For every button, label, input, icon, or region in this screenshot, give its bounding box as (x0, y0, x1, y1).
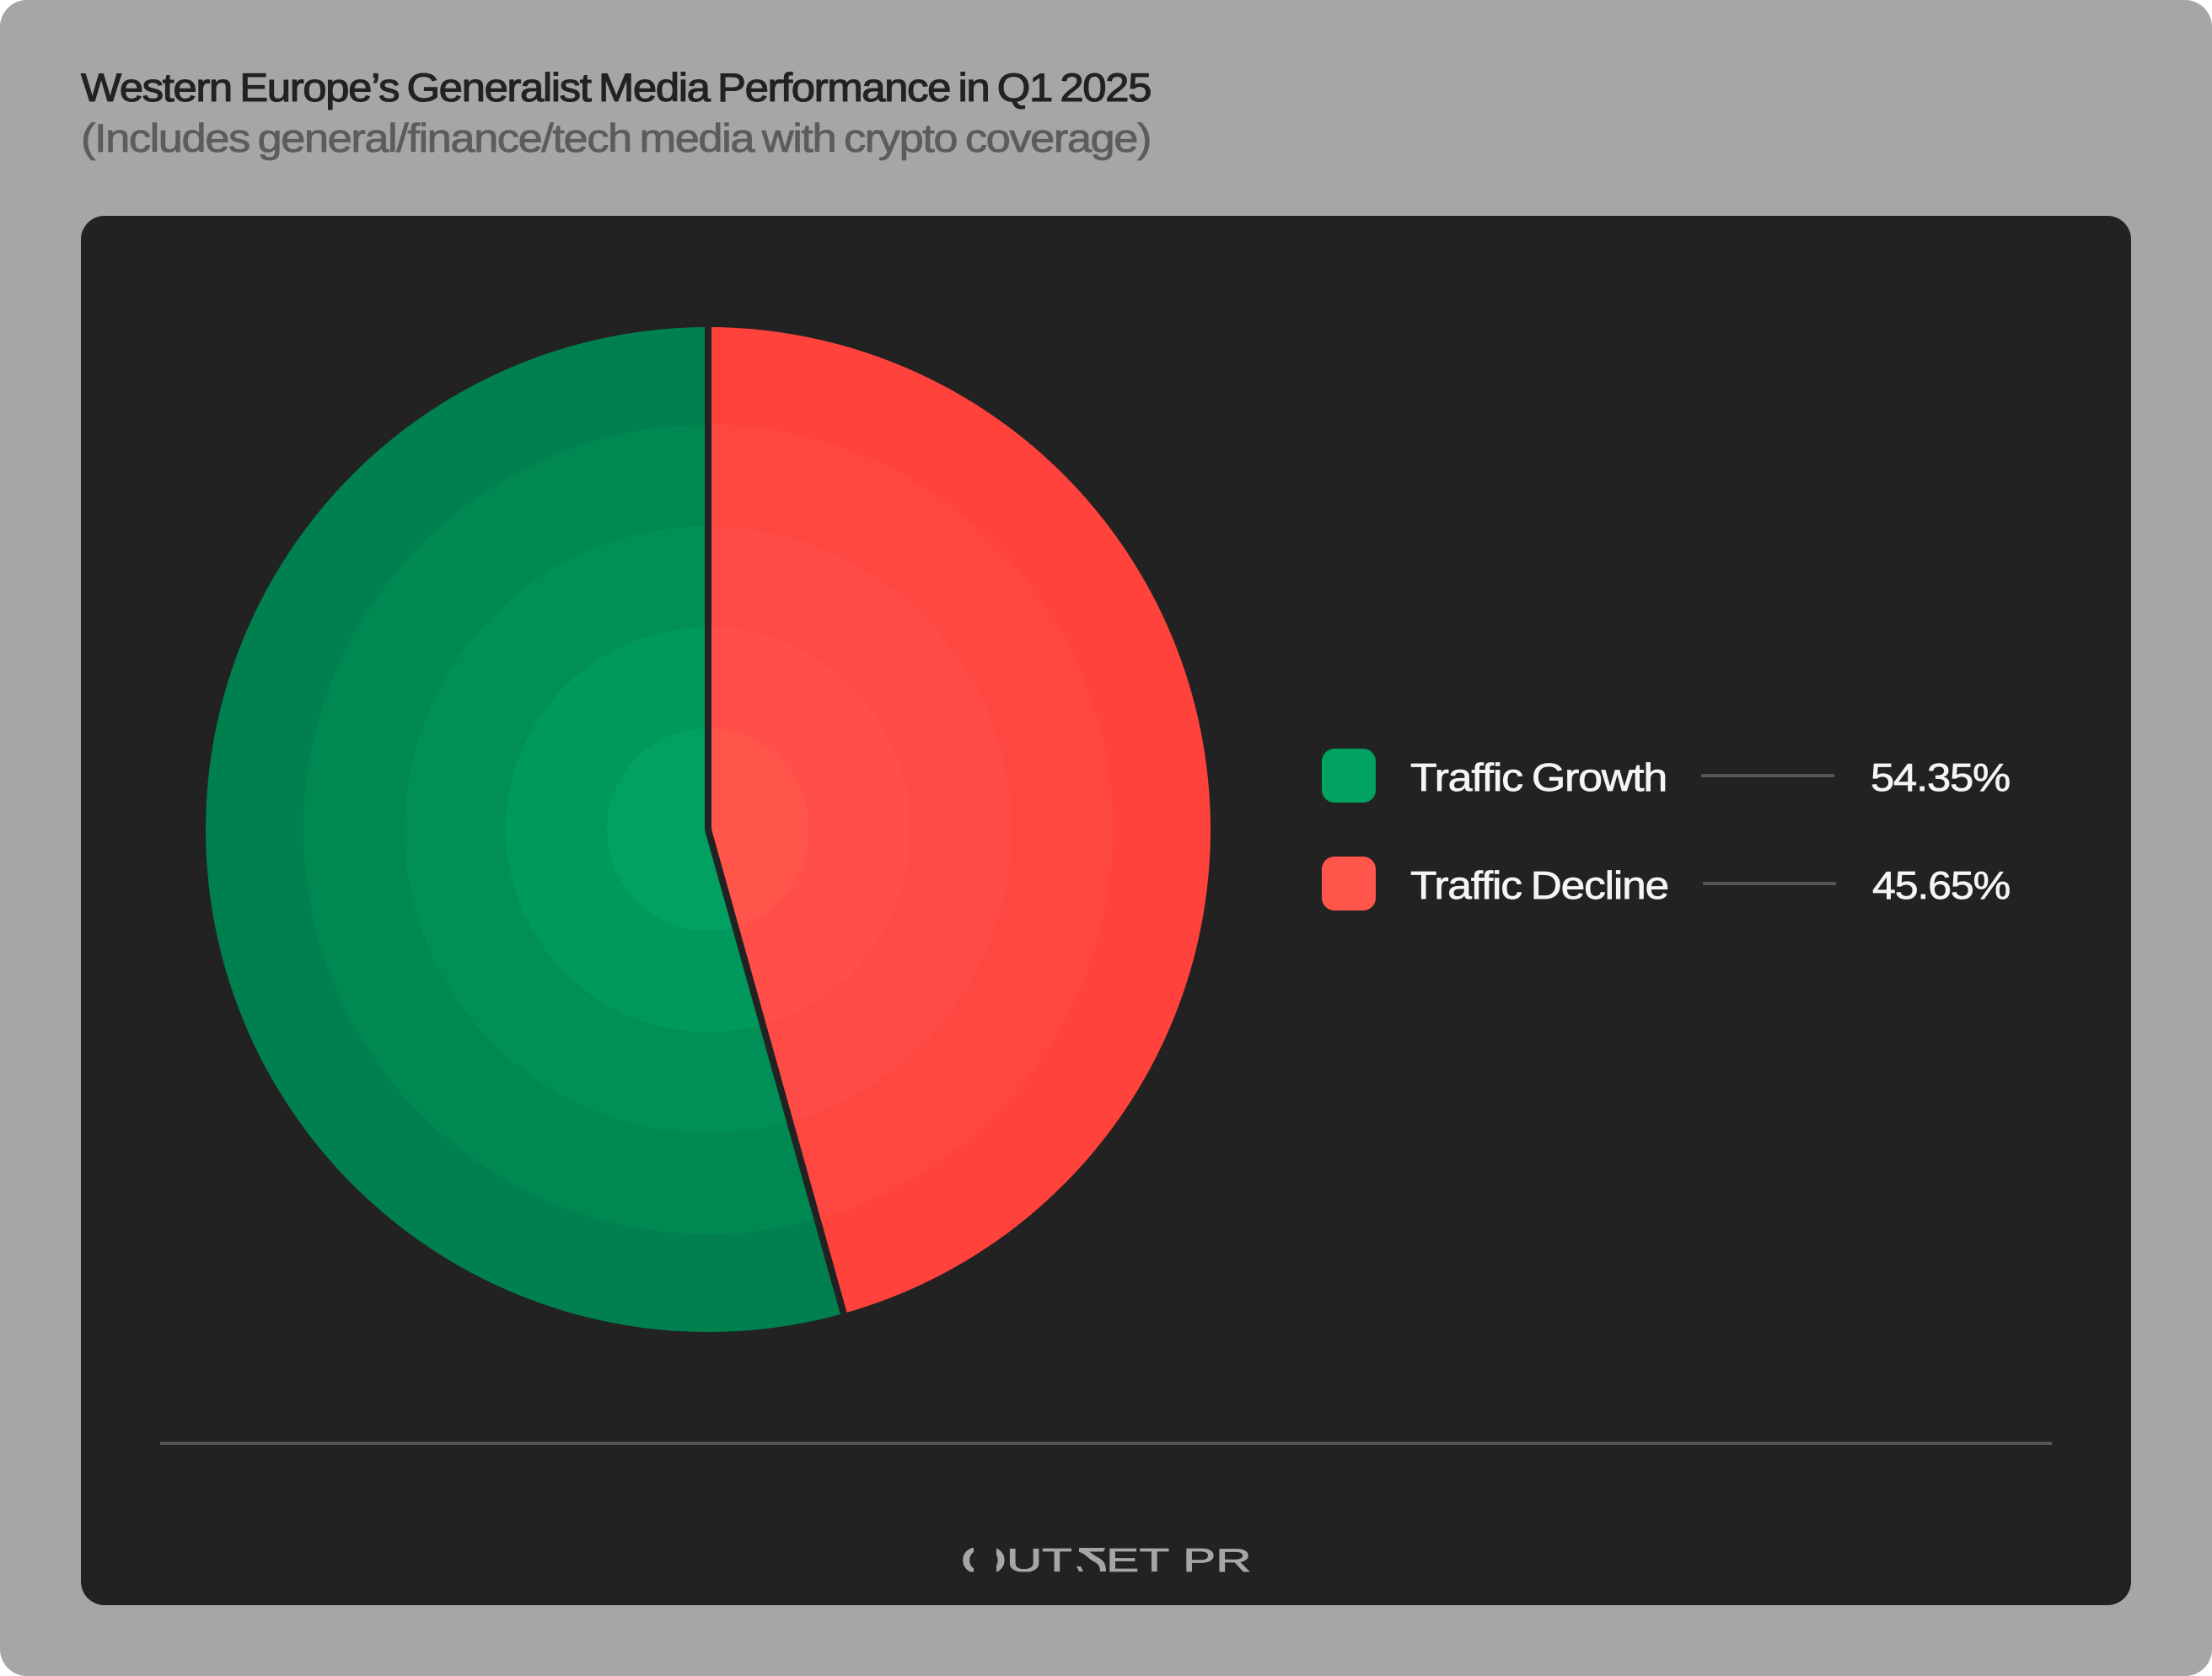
slice divider (708, 320, 846, 1320)
logo: Outset PR: O (961, 1539, 1007, 1582)
value: 45.65%: 45.65% (1872, 863, 2010, 907)
logo: Outset PR (963, 1548, 1250, 1571)
legend row: traffic decline (1322, 857, 2010, 911)
pie slice: traffic decline (711, 327, 1211, 1313)
leader line (1703, 882, 1836, 885)
pie slice: traffic growth (206, 327, 840, 1332)
pie chart (206, 320, 1211, 1332)
leader line (1701, 774, 1834, 777)
logo O cut (974, 1543, 996, 1577)
label: traffic growth: Traffic Growth (1410, 755, 1667, 799)
logo: Outset PR: UTSET PR (1007, 1542, 1252, 1579)
logo S cut (1074, 1543, 1109, 1577)
footer rule (160, 1442, 2052, 1445)
value: 54.35%: 54.35% (1871, 755, 2010, 799)
panel: chart (81, 216, 2131, 1605)
swatch: red (1322, 857, 1376, 911)
swatch: green (1322, 749, 1376, 803)
legend (1322, 749, 2010, 911)
title: Western Europe’s Generalist Media Performance in Q1 2025 (81, 65, 1151, 110)
label: traffic decline: Traffic Decline (1410, 863, 1668, 907)
logo S shape (1076, 1548, 1106, 1571)
legend row: traffic growth (1322, 749, 2010, 803)
subtitle: (Includes general/finance/tech media with crypto coverage) (81, 115, 1151, 160)
